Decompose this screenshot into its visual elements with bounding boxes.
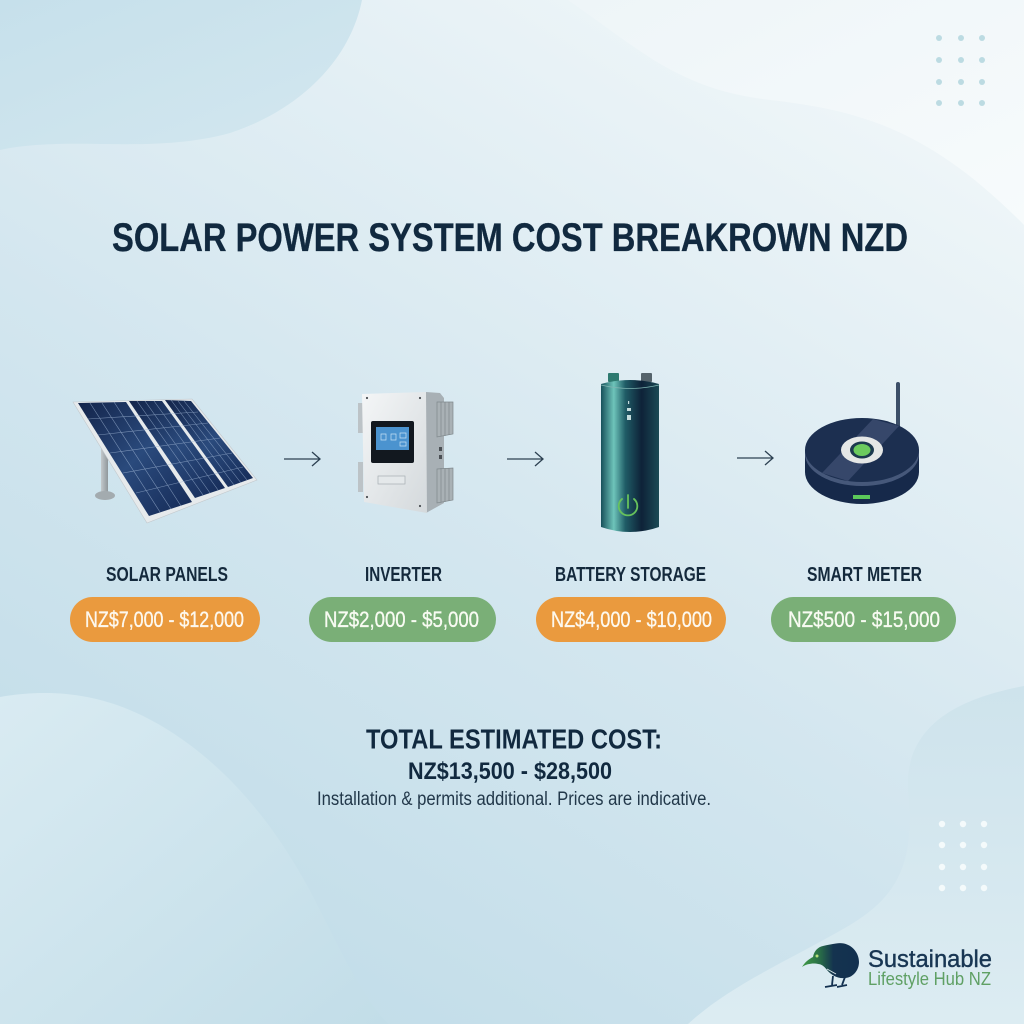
component: solar panels xyxy=(70,564,260,642)
total amount: NZ$13,500 - $28,500 xyxy=(408,758,612,785)
label: SOLAR PANELS xyxy=(106,564,228,586)
label: INVERTER xyxy=(365,564,442,586)
meter diagonal stripe xyxy=(822,419,899,481)
decoration: top right dots xyxy=(936,35,985,106)
total heading: TOTAL ESTIMATED COST: xyxy=(366,724,662,754)
meter indicator xyxy=(841,436,883,464)
icon: kiwi bird xyxy=(802,943,859,987)
background blob: bottom left xyxy=(0,693,388,1024)
inverter side xyxy=(426,392,444,513)
label: BATTERY STORAGE xyxy=(555,564,706,586)
battery body xyxy=(601,380,659,532)
background blob: bottom right xyxy=(688,686,1024,1024)
battery power symbol xyxy=(619,495,637,515)
component: inverter xyxy=(309,564,496,642)
component: smart meter xyxy=(771,564,956,642)
meter antenna xyxy=(896,382,900,428)
price: NZ$2,000 - $5,000 xyxy=(324,607,479,632)
logo tagline: Lifestyle Hub NZ xyxy=(868,969,991,989)
arrow 2 xyxy=(507,452,543,466)
meter LED xyxy=(853,495,870,499)
decoration: bottom right dots xyxy=(939,821,987,891)
inverter screws xyxy=(366,397,442,507)
logo xyxy=(802,943,992,989)
inverter label slot xyxy=(378,476,405,484)
price pill xyxy=(771,597,956,642)
background blob: top right xyxy=(568,0,1024,225)
logo name: Sustainable xyxy=(868,946,992,973)
battery lid line xyxy=(601,385,659,388)
icon: battery xyxy=(601,373,659,532)
battery status icons xyxy=(627,401,631,420)
price: NZ$7,000 - $12,000 xyxy=(85,607,244,632)
price: NZ$500 - $15,000 xyxy=(788,607,940,632)
meter top xyxy=(805,418,919,482)
arrow 1 xyxy=(284,452,320,466)
price pill xyxy=(309,597,496,642)
panel photovoltaic cells xyxy=(78,400,253,516)
icon: smart meter xyxy=(805,382,919,504)
background blob: top left xyxy=(0,0,362,150)
meter base xyxy=(805,450,919,504)
disclaimer: Installation & permits additional. Prices are indicative. xyxy=(317,789,711,810)
panel grid lines xyxy=(88,400,247,512)
inverter screen xyxy=(371,421,414,463)
panel stand xyxy=(95,448,115,500)
label: SMART METER xyxy=(807,564,922,586)
inverter fins xyxy=(437,402,453,503)
price: NZ$4,000 - $10,000 xyxy=(551,607,712,632)
price pill xyxy=(70,597,260,642)
panel frame xyxy=(73,399,257,523)
icon: inverter xyxy=(358,392,453,513)
total cost block xyxy=(317,724,711,810)
arrow 3 xyxy=(737,451,773,465)
inverter front face xyxy=(362,392,427,513)
battery terminals xyxy=(608,373,652,382)
icon: solar panel xyxy=(73,399,257,523)
meter rim xyxy=(805,422,919,486)
price pill xyxy=(536,597,726,642)
component: battery storage xyxy=(536,564,726,642)
inverter left clips xyxy=(358,403,363,492)
